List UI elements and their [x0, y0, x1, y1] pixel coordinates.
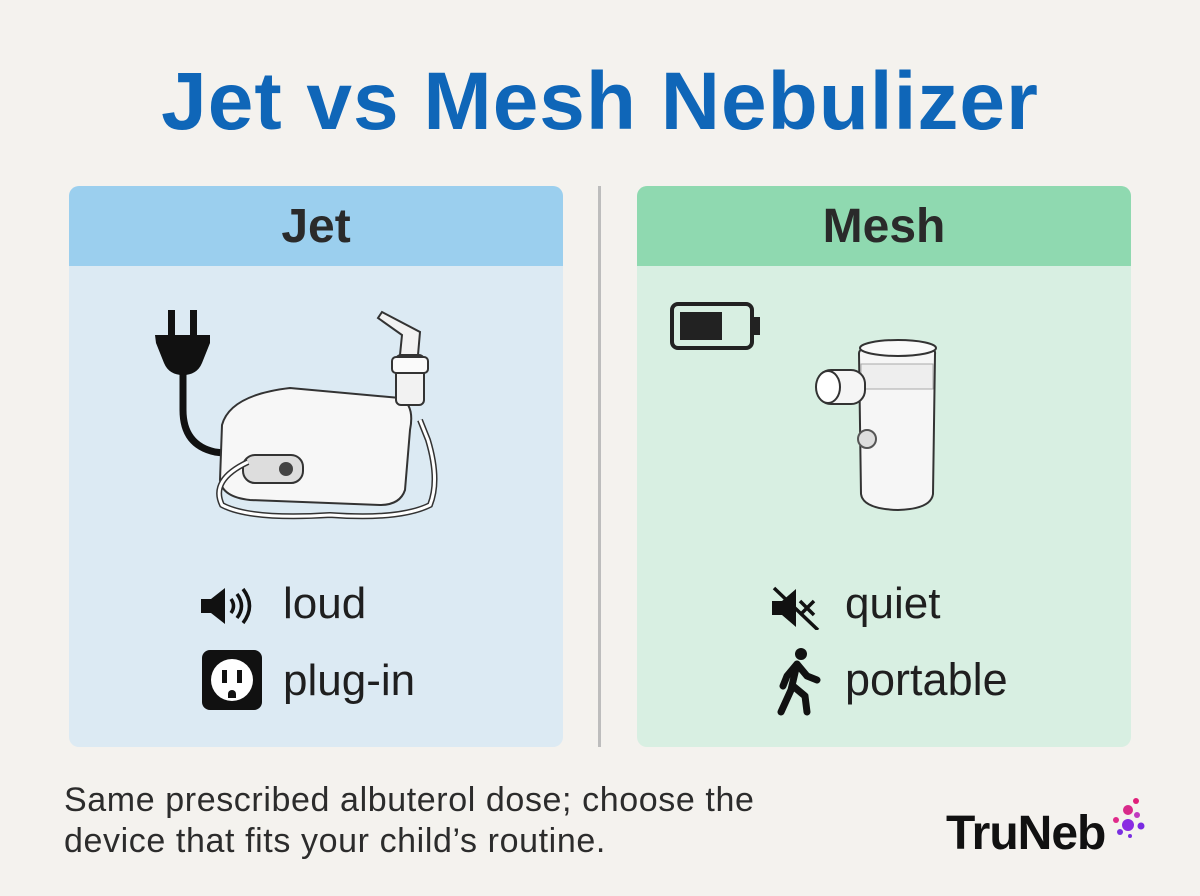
footer note — [64, 781, 754, 860]
title: Jet vs Mesh Nebulizer — [161, 56, 1039, 147]
icon: speaker — [201, 588, 252, 624]
loud item: loud — [283, 579, 366, 628]
icon: battery — [670, 302, 760, 350]
icon: dots — [1113, 798, 1144, 838]
logo: TruNeb — [946, 798, 1144, 860]
quiet item — [772, 579, 940, 630]
divider — [598, 186, 601, 747]
icon: outlet — [202, 650, 262, 710]
mesh header — [637, 186, 1131, 266]
panel: mesh — [637, 186, 1131, 747]
footer note: device that fits your child’s routine. — [64, 822, 606, 860]
mesh header: Mesh — [823, 200, 945, 253]
plug-in item: plug-in — [283, 656, 415, 705]
quiet item: quiet — [845, 579, 940, 628]
jet header: Jet — [281, 200, 351, 253]
jet nebulizer illustration — [155, 310, 438, 520]
panel: jet — [69, 186, 563, 747]
plug-in item — [202, 650, 415, 710]
mesh nebulizer illustration — [815, 339, 937, 511]
portable item — [778, 648, 1008, 716]
icon: mute — [772, 586, 820, 630]
icon: walking person — [778, 648, 820, 716]
loud item — [201, 579, 366, 628]
logo: TruNeb: TruNeb — [946, 807, 1105, 860]
footer note: Same prescribed albuterol dose; choose the — [64, 781, 754, 819]
portable item: portable — [845, 654, 1008, 705]
jet header — [69, 186, 563, 266]
